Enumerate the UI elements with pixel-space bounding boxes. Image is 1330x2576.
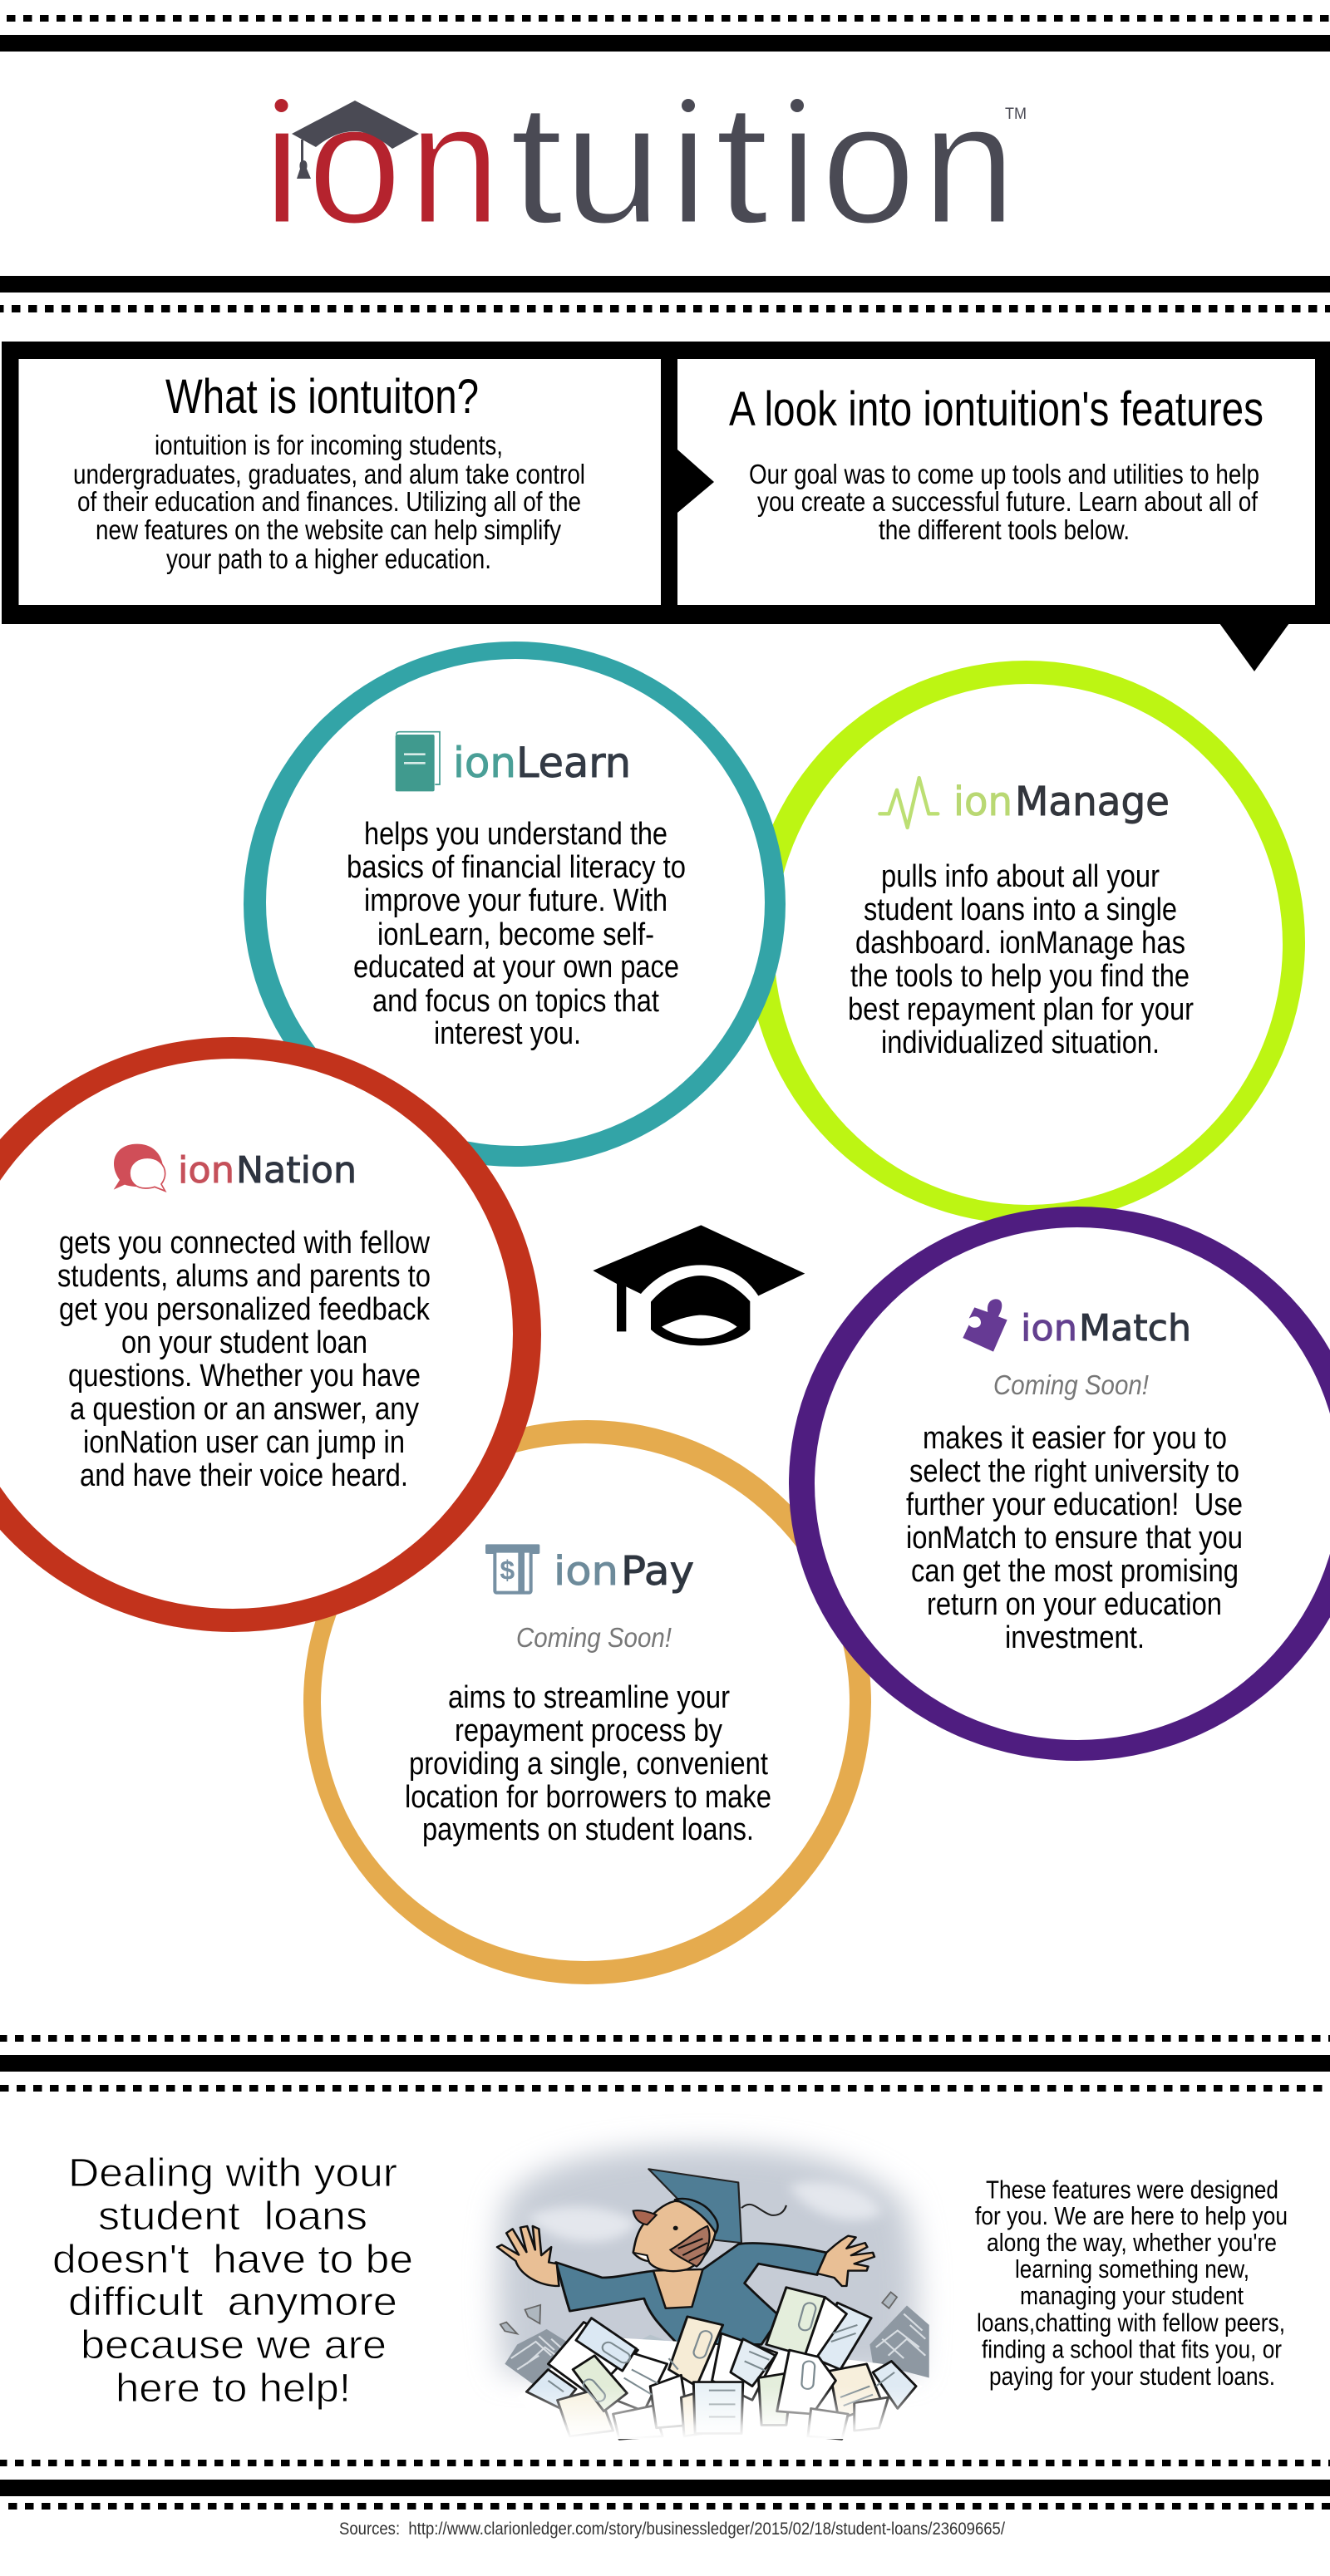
text block: features intro: the different tools below. — [879, 514, 1130, 545]
text block: ionPay description: location for borrowers to make — [405, 1780, 771, 1815]
icon: pulse — [879, 778, 938, 828]
text block: ionManage description: best repayment plan for your — [848, 992, 1194, 1027]
logo: iontuition — [263, 67, 1027, 259]
logo wordmark: u — [564, 69, 662, 259]
arrow: notch between boxes — [677, 450, 714, 513]
text block: these features were designed — [975, 2175, 1288, 2391]
icon: black graduation cap — [593, 1225, 805, 1345]
logo text: ionNation: Nation — [236, 1149, 357, 1192]
panel: ionManage circle — [747, 661, 1305, 1224]
text block: what is iontuition — [73, 430, 585, 574]
text block: these features were designed: paying for your student loans. — [989, 2362, 1275, 2391]
text block: ionLearn description: ionLearn, become self- — [377, 917, 654, 952]
text block: ionPay description: payments on student loans. — [422, 1812, 754, 1847]
text block: ionNation description: get you personalized feedback — [59, 1292, 431, 1327]
icon: logo graduation cap — [292, 101, 419, 179]
logo text: ionNation — [178, 1149, 357, 1192]
text block: what is iontuition: new features on the website can help simplify — [96, 514, 561, 545]
cap board — [648, 2169, 741, 2243]
logo text: ionPay — [554, 1548, 694, 1595]
text block: what is iontuition: iontuition is for incoming students, — [155, 430, 503, 460]
left hand — [497, 2226, 559, 2286]
panel: ionPay circle — [303, 1420, 871, 1984]
text block: what is iontuition: undergraduates, graduates, and alum take control — [73, 459, 585, 489]
text block: ionNation description: gets you connected with fellow — [59, 1226, 430, 1261]
cap band — [675, 2199, 717, 2233]
gown — [556, 2243, 826, 2344]
text block: ionMatch description: ionMatch to ensure that you — [906, 1521, 1243, 1556]
illustration: graduate drowning in paperwork — [477, 2146, 934, 2439]
logo text: ionMatch: ion — [1021, 1307, 1077, 1349]
text block: ionManage description: dashboard. ionManage has — [855, 926, 1185, 961]
text block: ionMatch description: investment. — [1005, 1620, 1145, 1655]
logo wordmark: i — [263, 68, 301, 259]
text block: ionLearn description: interest you. — [434, 1016, 581, 1051]
text block: ionLearn description — [347, 817, 686, 1051]
text block: ionPay description — [405, 1680, 771, 1847]
text block: ionNation description: on your student loan — [121, 1325, 367, 1360]
text block: ionMatch description: return on your education — [927, 1587, 1222, 1622]
logo text: ionPay: Pay — [621, 1548, 694, 1595]
text block: dealing with your student loans: student loans — [98, 2195, 367, 2239]
icon: puzzle piece — [963, 1299, 1007, 1352]
text block: ionMatch description: select the right university to — [909, 1454, 1239, 1489]
icon: book — [396, 732, 440, 791]
logo wordmark: i — [780, 68, 817, 259]
flying scraps — [500, 2292, 897, 2334]
text block: ionNation description: a question or an answer, any — [70, 1392, 419, 1427]
right hand — [817, 2236, 874, 2286]
logo wordmark: o — [821, 68, 915, 259]
text block: these features were designed: loans,chatting with fellow peers, — [977, 2308, 1285, 2337]
text block: these features were designed: along the way, whether you're — [987, 2228, 1277, 2257]
text block: ionMatch description: further your education! Use — [906, 1487, 1243, 1522]
text block: ionManage description: student loans into a single — [864, 892, 1177, 927]
text block: ionPay description: providing a single, convenient — [409, 1747, 768, 1782]
coming soon label: Coming Soon! — [516, 1622, 672, 1653]
head — [633, 2201, 717, 2271]
tassel — [741, 2205, 786, 2215]
text block: dealing with your student loans: here to help! — [116, 2367, 351, 2411]
text block: what is iontuition: your path to a higher education. — [166, 543, 491, 574]
text block: dealing with your student loans: Dealing with your — [68, 2151, 397, 2195]
text block: ionLearn description: helps you understand the — [364, 817, 667, 852]
white base behind papers — [517, 2336, 923, 2436]
text block: ionLearn description: educated at your own pace — [353, 950, 679, 985]
logo text: ionLearn: ion — [453, 739, 516, 787]
text block: ionManage description: the tools to help you find the — [850, 959, 1190, 994]
logo wordmark: n — [409, 67, 500, 259]
logo wordmark — [263, 67, 1016, 259]
text block: these features were designed: finding a school that fits you, or — [982, 2335, 1282, 2364]
logo wordmark: o — [308, 68, 401, 259]
logo wordmark: t — [715, 67, 769, 259]
text block: ionMatch description — [906, 1421, 1243, 1655]
panel: ionMatch circle — [789, 1207, 1330, 1761]
text block: ionLearn description: basics of financial literacy to — [347, 850, 686, 885]
text block: ionMatch description: makes it easier for you to — [923, 1421, 1227, 1456]
text block: ionNation description: and have their voice heard. — [80, 1458, 408, 1493]
text block: ionNation description: ionNation user can jump in — [83, 1425, 405, 1460]
text block: ionPay description: aims to streamline your — [448, 1680, 730, 1715]
text block: ionManage description: pulls info about all your — [881, 859, 1160, 894]
logo text: ionPay: ion — [554, 1548, 618, 1595]
hair — [670, 2226, 709, 2267]
logo wordmark: i — [670, 68, 707, 259]
logo text: ionLearn: Learn — [516, 739, 631, 787]
text block: these features were designed: These features were designed — [986, 2175, 1278, 2204]
bottom fade — [477, 2387, 934, 2439]
background haze — [498, 2146, 917, 2375]
logo wordmark: n — [923, 68, 1016, 259]
icon: payment machine — [485, 1544, 539, 1593]
logo text: ionMatch: Match — [1079, 1307, 1191, 1349]
icon: chat bubbles — [114, 1144, 165, 1191]
logo wordmark: t — [510, 67, 564, 259]
text block: dealing with your student loans — [52, 2151, 413, 2411]
text block: ionNation description: students, alums and parents to — [57, 1259, 431, 1294]
panel: ionLearn circle — [244, 642, 786, 1167]
stacked papers — [526, 2288, 916, 2439]
logo text: ionManage: Manage — [1015, 779, 1170, 825]
panel: ionNation circle — [0, 1037, 541, 1632]
text block: ionMatch description: can get the most promising — [911, 1554, 1239, 1589]
text block: ionManage description: individualized situation. — [881, 1025, 1160, 1060]
mouth — [633, 2253, 648, 2261]
coming soon label: Coming Soon! — [993, 1369, 1149, 1400]
text block: ionManage description — [848, 859, 1194, 1060]
trademark: TM — [1005, 106, 1027, 123]
heading: what is iontuition: What is iontuiton? — [165, 370, 479, 424]
text block: ionNation description — [57, 1226, 431, 1493]
text block: these features were designed: managing your student — [1020, 2281, 1244, 2310]
text block: what is iontuition: of their education and finances. Utilizing all of the — [77, 486, 581, 517]
text block: features intro — [749, 459, 1259, 545]
logo text: ionManage: ion — [953, 779, 1012, 825]
neck — [653, 2269, 702, 2308]
sources line: Sources: http://www.clarionledger.com/story/businessledger/2015/02/18/student-loans/23609665/ — [339, 2519, 1005, 2539]
logo text: ionNation: ion — [178, 1149, 234, 1192]
logo text: ionLearn — [453, 739, 631, 787]
debris piles — [505, 2329, 589, 2387]
icon: payment machine: $ — [500, 1556, 515, 1585]
text block: ionLearn description: improve your future. With — [364, 883, 667, 918]
logo text: ionMatch — [1021, 1307, 1191, 1349]
text block: ionPay description: repayment process by — [455, 1713, 722, 1748]
text block: dealing with your student loans: because we are — [81, 2323, 387, 2367]
text block: ionNation description: questions. Whether you have — [68, 1359, 421, 1394]
text block: these features were designed: learning something new, — [1015, 2254, 1249, 2283]
panel: intro boxes — [2, 342, 1330, 671]
arrow: pointer down — [1219, 623, 1289, 671]
paper clips and lines — [548, 2302, 894, 2416]
text block: dealing with your student loans: doesn't have to be — [52, 2238, 413, 2282]
text block: dealing with your student loans: difficult anymore — [68, 2280, 397, 2324]
text block: ionLearn description: and focus on topics that — [372, 984, 659, 1019]
